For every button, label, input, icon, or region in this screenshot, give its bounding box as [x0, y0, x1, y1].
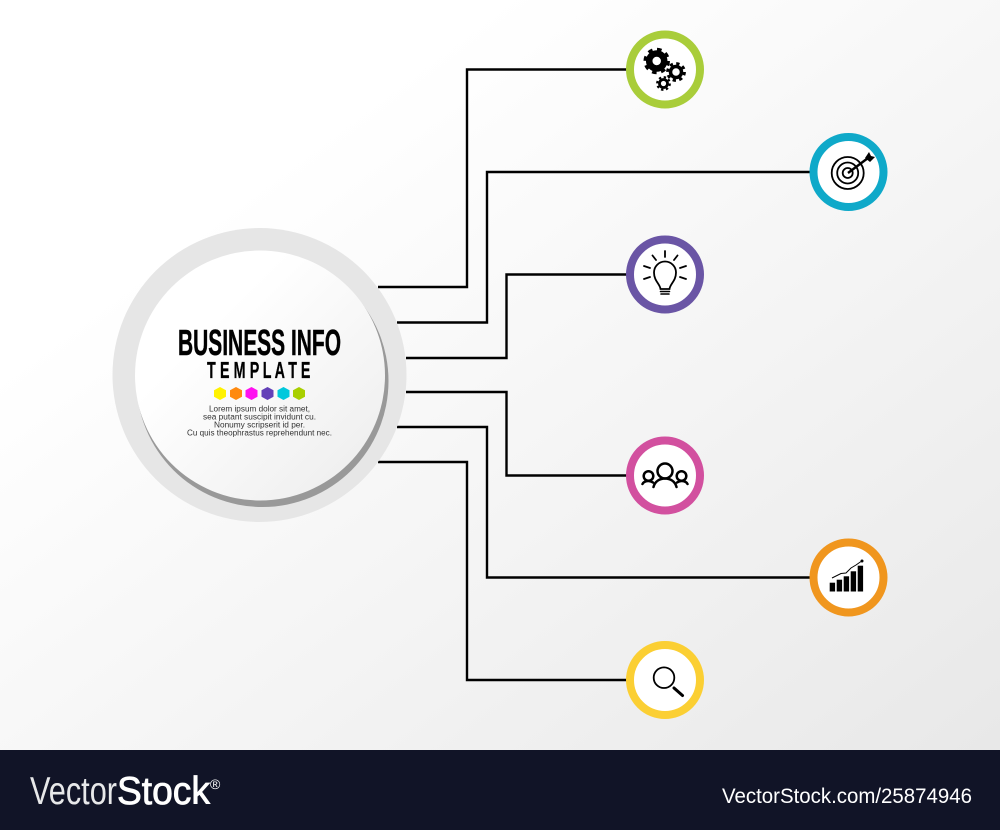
- central circle: [112, 228, 406, 522]
- node: gears: [630, 34, 700, 104]
- icon: people: [642, 464, 688, 487]
- subtitle: template: T: [207, 359, 216, 384]
- icon: magnifying glass: [654, 667, 682, 696]
- footer bar: [0, 750, 1000, 830]
- icon: rising bar chart: [830, 560, 864, 592]
- node: people: [630, 440, 700, 510]
- footer url: VectorStock.com/25874946: [722, 785, 972, 808]
- icon: light bulb: [644, 251, 686, 294]
- body text: Cu quis theophrastus reprehendunt nec.: [187, 428, 332, 438]
- footer bar: Stock: [117, 770, 210, 813]
- colour hexagons: [214, 387, 305, 400]
- icon: gears: [645, 50, 684, 90]
- subtitle: template: P: [250, 359, 259, 384]
- subtitle: template: A: [275, 359, 285, 384]
- body text: sea putant suscipit invidunt cu.: [203, 412, 316, 422]
- subtitle: template: L: [263, 359, 272, 384]
- icon: target with arrow: [832, 152, 875, 189]
- node: bar chart: [814, 542, 884, 612]
- title: business info: BUSINESS INFO: [178, 322, 341, 363]
- body text: Lorem ipsum dolor sit amet,: [209, 404, 310, 414]
- subtitle: template: M: [234, 359, 246, 384]
- node: light bulb: [630, 240, 700, 310]
- connector lines: [378, 70, 812, 680]
- footer bar: ®: [210, 776, 221, 792]
- body text: Nonumy scripserit id per.: [214, 420, 305, 430]
- node: target: [814, 137, 884, 207]
- subtitle: template: E: [301, 359, 311, 384]
- subtitle: template: T: [288, 359, 297, 384]
- subtitle: template: E: [220, 359, 230, 384]
- footer logo: Vector: [30, 770, 117, 813]
- node: search: [630, 645, 700, 715]
- body text: [187, 404, 332, 438]
